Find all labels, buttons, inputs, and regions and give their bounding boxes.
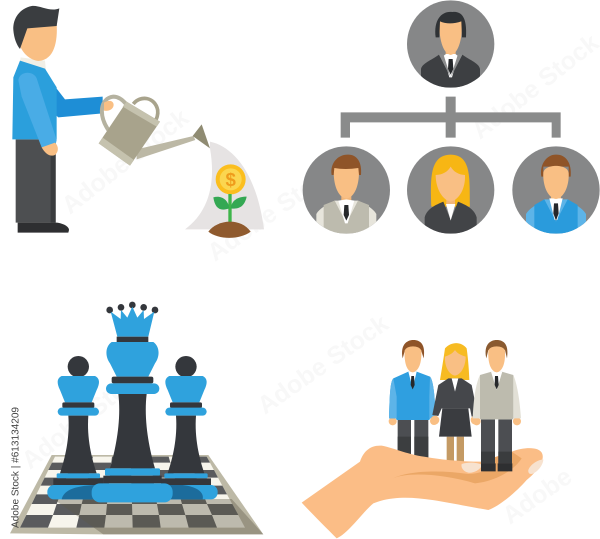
avatar: boss <box>407 0 494 88</box>
open hand <box>302 446 543 538</box>
figure: man in vest <box>473 340 521 471</box>
shoes <box>481 463 512 471</box>
forearm <box>50 80 103 117</box>
hair <box>402 340 424 358</box>
spout <box>137 136 195 159</box>
face <box>488 346 505 372</box>
trousers <box>481 419 512 463</box>
base <box>92 483 173 502</box>
dark squares <box>20 457 238 528</box>
ring <box>106 383 159 394</box>
base shadow <box>62 485 110 499</box>
water stream <box>185 142 264 229</box>
neck <box>551 196 561 198</box>
back handle <box>102 97 126 130</box>
face <box>439 20 462 55</box>
vest <box>480 372 513 419</box>
hands <box>473 417 521 425</box>
head <box>165 376 207 402</box>
hair <box>486 340 507 358</box>
face <box>543 166 569 199</box>
neck <box>446 200 455 207</box>
shirt <box>491 372 502 390</box>
shirt and tie <box>408 372 417 388</box>
face <box>405 346 421 372</box>
sleeves <box>526 199 586 234</box>
sleeve <box>18 73 57 147</box>
sleeves <box>316 201 376 234</box>
band <box>164 473 208 478</box>
collar <box>170 402 202 408</box>
head <box>106 342 159 377</box>
light squares <box>20 457 245 528</box>
neck <box>341 196 352 200</box>
coin inner <box>220 168 242 190</box>
sleeves <box>473 375 521 418</box>
long hair <box>431 155 470 207</box>
band <box>57 473 100 478</box>
background <box>303 146 390 234</box>
neck and collar <box>20 57 46 71</box>
trouser shade <box>51 143 56 223</box>
bottom band <box>99 138 134 166</box>
sweater <box>389 372 436 420</box>
thumb nail <box>461 463 482 473</box>
stock id label: Adobe Stock | #613134209 <box>10 407 22 528</box>
jacket <box>432 378 478 417</box>
coin outer <box>216 164 246 194</box>
background <box>407 146 494 234</box>
tie <box>553 203 559 221</box>
hands <box>431 416 479 424</box>
trousers <box>398 419 428 458</box>
right leaf <box>231 197 247 209</box>
base <box>47 485 110 499</box>
band <box>105 468 160 476</box>
tie <box>448 59 453 75</box>
stem <box>110 394 155 468</box>
background <box>512 146 600 234</box>
connector lines <box>341 97 561 138</box>
hair <box>331 155 361 175</box>
skirt <box>439 408 472 437</box>
background watermarks: Adobe Stock <box>16 359 154 475</box>
crown balls <box>106 302 158 313</box>
figure: man <box>12 6 103 233</box>
jacket <box>421 55 480 88</box>
chess board <box>10 455 263 534</box>
jacket <box>425 202 477 234</box>
figure: woman <box>431 343 479 462</box>
trouser shade <box>398 437 428 458</box>
figure: man in blue <box>389 340 438 458</box>
background <box>407 0 494 88</box>
hands <box>389 417 438 425</box>
board shadow <box>53 499 263 534</box>
shirt <box>549 198 563 220</box>
icon: watering can <box>99 97 210 166</box>
shirt <box>443 54 458 77</box>
face <box>21 24 57 61</box>
left lapel <box>439 54 451 77</box>
panel: team on open hand <box>302 340 543 538</box>
background watermarks: Adobe Stock <box>202 156 344 267</box>
collar <box>62 402 94 408</box>
hair <box>541 155 571 177</box>
shoe <box>18 223 69 233</box>
trousers <box>16 139 56 223</box>
top band <box>123 102 160 127</box>
frame <box>10 455 263 534</box>
ring <box>165 408 207 416</box>
chess piece: right bishop <box>155 356 218 499</box>
crown band <box>117 337 148 342</box>
hair <box>435 12 466 37</box>
vest <box>324 201 369 234</box>
can body <box>99 102 160 166</box>
face <box>445 350 466 376</box>
sweater <box>534 199 578 234</box>
finger nail <box>528 459 543 474</box>
shirt <box>446 204 455 221</box>
face <box>436 167 465 202</box>
sleeve shade <box>389 377 436 418</box>
head <box>58 376 99 402</box>
chess piece: left bishop <box>47 356 110 499</box>
shirt <box>338 199 354 223</box>
right lapel <box>451 54 462 77</box>
dollar sign: $ <box>225 169 236 190</box>
foot <box>103 476 162 483</box>
foot <box>53 478 103 485</box>
avatar: man in blue <box>512 146 600 234</box>
palm <box>302 446 543 538</box>
panel: org chart <box>303 0 600 234</box>
background watermarks: Adobe Stock <box>56 104 194 220</box>
stem <box>60 416 97 473</box>
face <box>334 168 359 199</box>
trouser shade <box>481 452 512 463</box>
avatar: woman <box>407 146 494 234</box>
crown <box>111 307 154 337</box>
icon: dollar flower plant <box>208 164 251 238</box>
left leaf <box>213 197 229 210</box>
top handle <box>133 98 158 122</box>
tie <box>344 205 349 221</box>
background watermarks: Adobe <box>497 462 577 530</box>
hair <box>440 343 469 380</box>
rose <box>193 124 210 148</box>
panel: man watering money plant <box>12 6 264 238</box>
hair <box>13 6 59 49</box>
avatar: man in vest <box>303 146 390 234</box>
lower hand <box>42 143 58 156</box>
base shadow <box>158 485 203 499</box>
background watermarks: Adobe Stock <box>466 29 600 145</box>
palm crease <box>392 452 522 483</box>
ball <box>68 356 89 377</box>
collar <box>112 377 153 383</box>
foot <box>161 478 211 485</box>
neck <box>446 52 456 54</box>
background watermarks: Adobe Stock <box>252 309 394 420</box>
holding hand <box>104 101 114 111</box>
torso <box>12 61 57 139</box>
legs <box>447 437 464 462</box>
blouse <box>452 378 458 392</box>
stem <box>225 194 235 224</box>
chess piece: queen <box>92 302 173 502</box>
stem <box>168 416 204 473</box>
soil mound <box>208 222 251 238</box>
tie <box>411 376 415 389</box>
ring <box>58 408 99 416</box>
base <box>155 485 218 499</box>
tie <box>495 376 499 389</box>
panel: chess pieces on board <box>10 302 263 534</box>
ball <box>175 356 197 377</box>
